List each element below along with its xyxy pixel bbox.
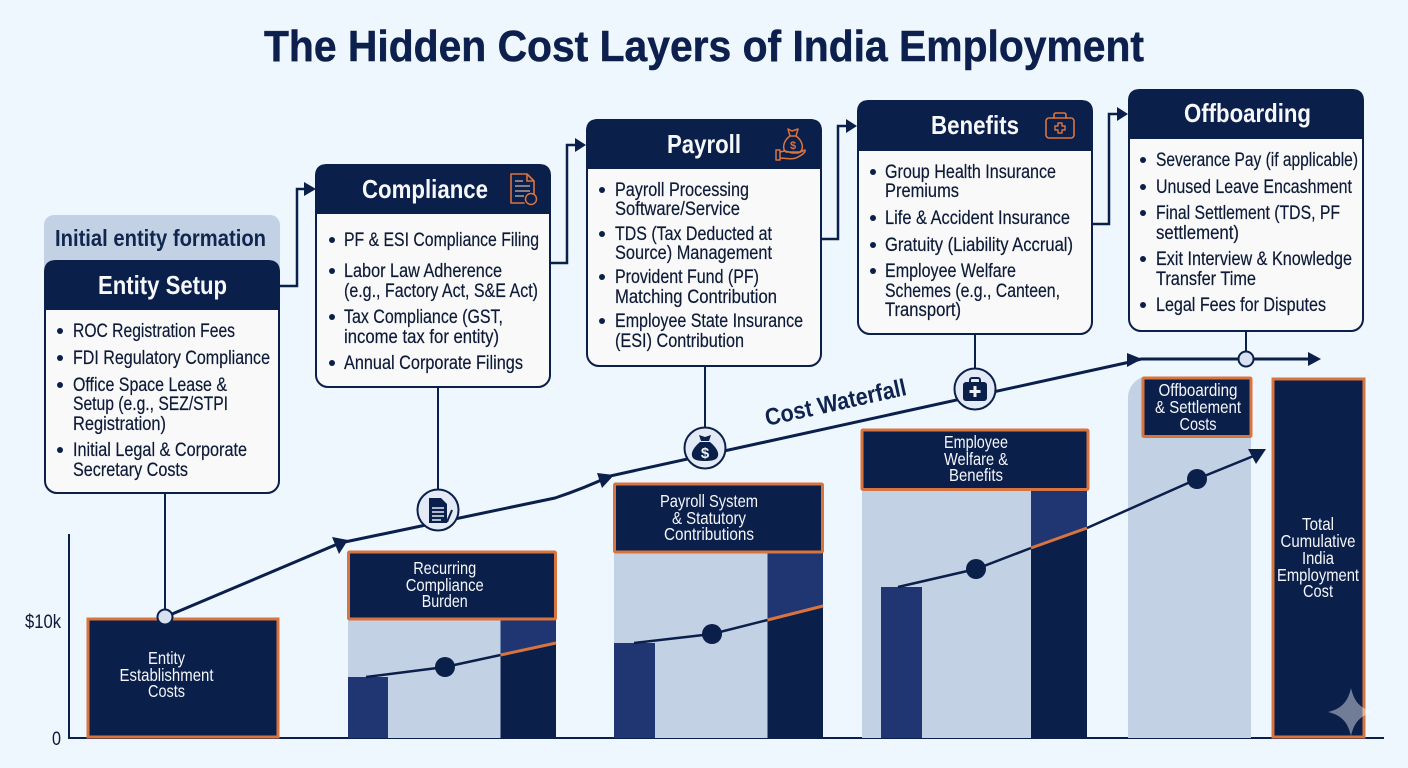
list: Tax Compliance (GST, xyxy=(344,307,503,328)
bar: payroll system and statutory contributions: & Statutory xyxy=(672,508,746,528)
list: Life & Accident Insurance xyxy=(885,208,1070,229)
bar: payroll system and statutory contributions xyxy=(614,484,823,738)
list: Secretary Costs xyxy=(73,460,188,481)
bar: payroll system and statutory contributions: Contributions xyxy=(664,524,754,544)
tag: initial entity formation: Initial entity formation xyxy=(55,225,266,251)
axis label: 0: 0 xyxy=(52,729,61,750)
arrow: cost waterfall line xyxy=(158,352,1321,624)
list: settlement) xyxy=(1156,223,1239,244)
panel: offboarding xyxy=(1128,89,1364,331)
list: TDS (Tax Deducted at xyxy=(615,224,773,245)
list: Software/Service xyxy=(615,199,740,220)
icon: document on line xyxy=(418,490,458,530)
list: PF & ESI Compliance Filing xyxy=(344,230,539,251)
panel: payroll xyxy=(586,119,822,366)
bar: offboarding and settlement costs xyxy=(1128,377,1251,738)
arrow: inner rising cost line xyxy=(1087,449,1266,528)
bar: total cumulative cost: Cumulative xyxy=(1280,531,1356,551)
label: cost waterfall: Cost Waterfall xyxy=(762,374,909,432)
list xyxy=(57,321,270,481)
list: Initial Legal & Corporate xyxy=(73,440,247,461)
bar: employee welfare and benefits: Welfare & xyxy=(944,449,1008,469)
stems from cards to waterfall xyxy=(165,331,1246,610)
list: Provident Fund (PF) xyxy=(615,267,759,288)
bar: total cumulative cost: Cost xyxy=(1303,581,1333,601)
icon: money bag in hand xyxy=(776,129,805,160)
list: Setup (e.g., SEZ/STPI xyxy=(73,394,228,415)
list: Group Health Insurance xyxy=(885,162,1056,183)
bar: entity establishment costs xyxy=(88,619,278,737)
list xyxy=(870,162,1073,321)
list: income tax for entity) xyxy=(344,327,499,348)
axis label: $10k: $10k xyxy=(25,612,61,633)
list: Transfer Time xyxy=(1156,269,1256,290)
icon: money bag on line: $ xyxy=(701,445,710,462)
icon: money bag in hand: $ xyxy=(790,140,796,152)
list xyxy=(1140,150,1358,316)
bar: payroll system and statutory contributions: Payroll System xyxy=(660,491,758,511)
list: Registration) xyxy=(73,414,166,435)
bar: employee welfare and benefits: Employee xyxy=(944,432,1008,452)
list: Labor Law Adherence xyxy=(344,261,502,282)
panel: entity setup xyxy=(44,260,280,493)
chart axes xyxy=(25,534,1384,750)
icon: sparkle watermark xyxy=(1328,688,1374,736)
list: Employee Welfare xyxy=(885,261,1016,282)
panel: benefits xyxy=(857,100,1093,334)
heading: Offboarding xyxy=(1184,98,1311,128)
icon: compliance document xyxy=(511,174,536,204)
bar: entity establishment costs: Entity xyxy=(148,648,185,668)
bar: total cumulative cost xyxy=(1273,379,1364,737)
list: Matching Contribution xyxy=(615,287,777,308)
bar: total cumulative cost: India xyxy=(1302,548,1334,568)
bar: total cumulative cost: Total xyxy=(1302,514,1334,534)
list xyxy=(599,180,803,352)
list: ROC Registration Fees xyxy=(73,321,235,342)
list: Unused Leave Encashment xyxy=(1156,177,1353,198)
list: (ESI) Contribution xyxy=(615,331,744,352)
list: (e.g., Factory Act, S&E Act) xyxy=(344,281,538,302)
panel: compliance xyxy=(315,164,551,387)
list: Payroll Processing xyxy=(615,180,749,201)
heading: Benefits xyxy=(931,110,1019,140)
heading: Payroll xyxy=(667,129,741,159)
bar: offboarding and settlement costs: & Settlement xyxy=(1155,397,1241,417)
list: Source) Management xyxy=(615,243,773,264)
heading: Entity Setup xyxy=(98,270,227,300)
bar: offboarding and settlement costs: Costs xyxy=(1180,414,1217,434)
bar: total cumulative cost: Employment xyxy=(1277,565,1359,585)
list: Annual Corporate Filings xyxy=(344,353,523,374)
list: Exit Interview & Knowledge xyxy=(1156,249,1352,270)
list: Employee State Insurance xyxy=(615,311,803,332)
list xyxy=(329,230,539,374)
bar: offboarding and settlement costs: Offboarding xyxy=(1158,380,1238,400)
bar: recurring compliance burden xyxy=(348,552,556,738)
list: Premiums xyxy=(885,181,959,202)
heading: Compliance xyxy=(362,174,488,204)
icon: medical kit on line xyxy=(954,368,996,410)
bar: recurring compliance burden: Burden xyxy=(422,591,468,611)
bar: employee welfare and benefits xyxy=(862,430,1088,738)
bar: recurring compliance burden: Compliance xyxy=(406,575,484,595)
list: Severance Pay (if applicable) xyxy=(1156,150,1358,171)
tag: initial entity formation xyxy=(44,215,280,275)
connector arrows between cards xyxy=(280,107,1128,286)
icon: money bag on line xyxy=(684,428,726,468)
list: Schemes (e.g., Canteen, xyxy=(885,281,1060,302)
bar: entity establishment costs: Costs xyxy=(148,681,185,701)
title: The Hidden Cost Layers of India Employment xyxy=(264,22,1144,71)
bar: entity establishment costs: Establishment xyxy=(120,665,214,685)
bar: recurring compliance burden: Recurring xyxy=(413,558,476,578)
list: Office Space Lease & xyxy=(73,375,227,396)
icon: medical kit xyxy=(1046,113,1074,138)
list: Gratuity (Liability Accrual) xyxy=(885,235,1073,256)
list: FDI Regulatory Compliance xyxy=(73,348,270,369)
bar: employee welfare and benefits: Benefits xyxy=(949,465,1003,485)
list: Legal Fees for Disputes xyxy=(1156,295,1326,316)
list: Final Settlement (TDS, PF xyxy=(1156,203,1340,224)
list: Transport) xyxy=(885,300,961,321)
